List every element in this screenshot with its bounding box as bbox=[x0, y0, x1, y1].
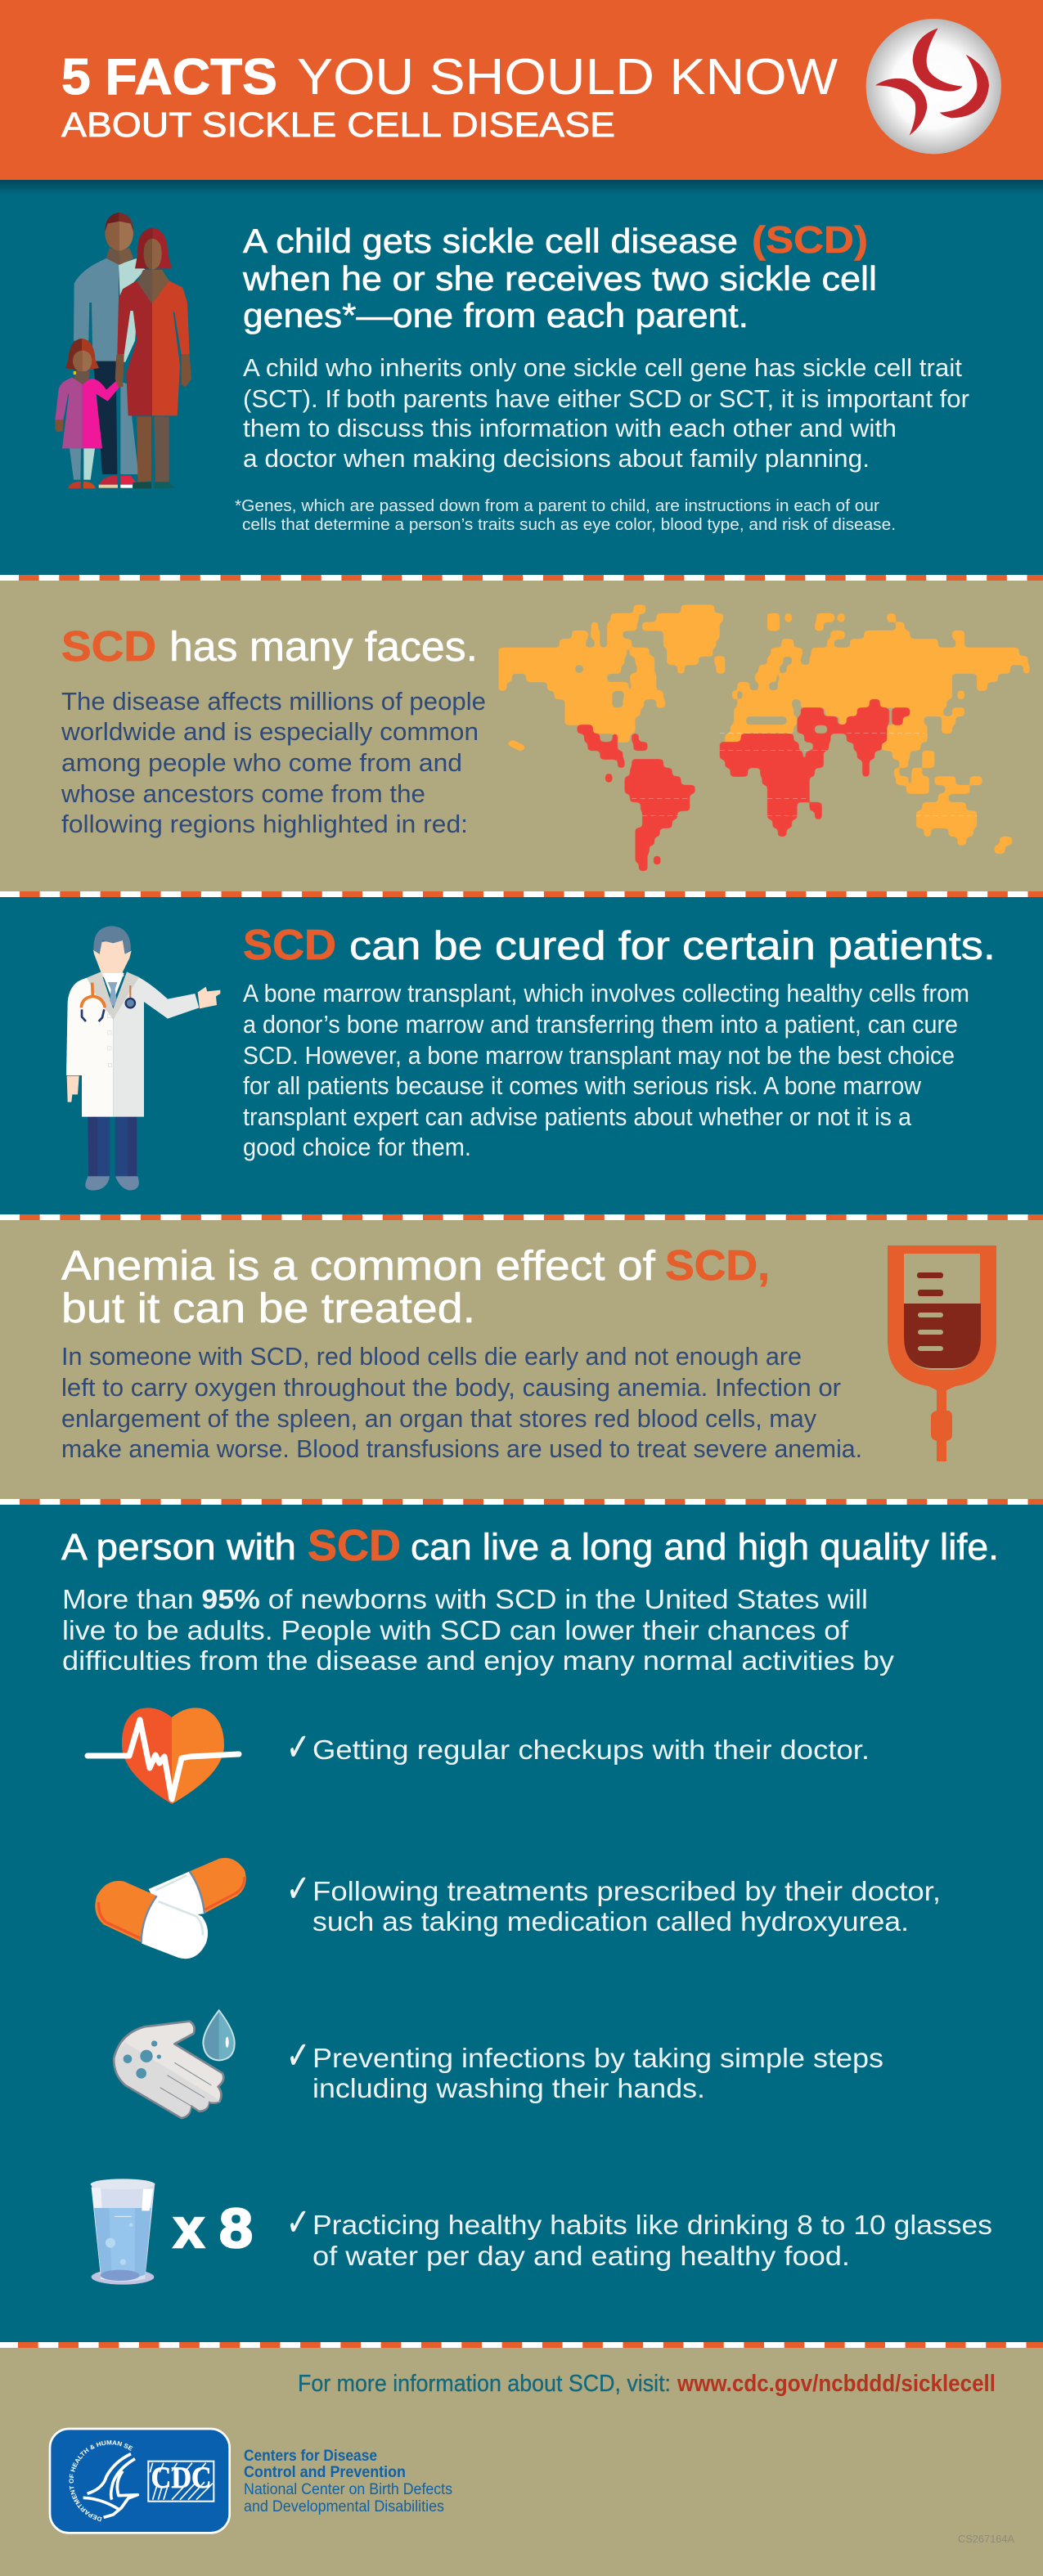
text block: worldwide prevalence: worldwide and is especially common bbox=[61, 717, 479, 746]
heading: anemia: but it can be treated. bbox=[61, 1285, 475, 1331]
panel: footer bbox=[0, 2348, 1043, 2576]
text block: agency names: and Developmental Disabilities bbox=[244, 2498, 444, 2515]
header banner bbox=[0, 0, 1043, 180]
text block: 95 percent of newborns: difficulties from the disease and enjoy many normal activities by bbox=[62, 1645, 895, 1676]
logo: HHS and CDC: CDC bbox=[151, 2462, 212, 2495]
text block: 95 percent of newborns bbox=[62, 1584, 895, 1676]
callout: more information link: For more information about SCD, visit: bbox=[298, 2371, 671, 2397]
checklist item: preventing infections: ✓ bbox=[286, 2033, 310, 2077]
heading: how SCD is inherited: (SCD) bbox=[752, 218, 868, 261]
text block: sickle cell trait bbox=[243, 353, 969, 473]
footnote bbox=[235, 497, 896, 534]
panel: anemia bbox=[0, 1220, 1043, 1499]
icon: capsules bbox=[95, 1858, 246, 1959]
panel: how a child gets SCD bbox=[0, 180, 1043, 575]
checklist item: healthy habits bbox=[286, 2200, 992, 2271]
label: times eight: 8 bbox=[219, 2197, 253, 2260]
checklist item: regular checkups: ✓ bbox=[286, 1725, 310, 1769]
text block: agency names: Control and Prevention bbox=[244, 2464, 406, 2481]
checklist item: treatments: Following treatments prescribed by their doctor, bbox=[312, 1876, 941, 1906]
heading: anemia: SCD, bbox=[665, 1242, 770, 1290]
icon: hand and water drop bbox=[114, 2010, 235, 2118]
checklist item: preventing infections: Preventing infections by taking simple steps bbox=[312, 2043, 883, 2073]
text block: bone marrow transplant: SCD. However, a bone marrow transplant may not be the best choice bbox=[243, 1041, 955, 1070]
heading: many faces: SCD bbox=[61, 623, 156, 671]
text block: bone marrow transplant: transplant expert can advise patients about whether or not it is a bbox=[243, 1102, 912, 1131]
text block: agency names bbox=[244, 2448, 452, 2515]
heading: how SCD is inherited: when he or she receives two sickle cell bbox=[242, 259, 877, 298]
text block: agency names: Centers for Disease bbox=[244, 2448, 377, 2465]
icon: blood bag bbox=[888, 1245, 996, 1461]
label: times eight: x bbox=[173, 2197, 205, 2260]
heading: anemia: Anemia is a common effect of bbox=[61, 1242, 656, 1289]
callout: more information link bbox=[298, 2371, 996, 2397]
panel: long and high quality life bbox=[0, 1505, 1043, 2342]
heading: how SCD is inherited bbox=[242, 218, 877, 334]
callout: more information link: www.cdc.gov/ncbddd/sicklecell bbox=[677, 2371, 996, 2397]
heading: quality of life: A person with bbox=[61, 1526, 296, 1568]
text block: anemia explanation: left to carry oxygen throughout the body, causing anemia. Infection or bbox=[61, 1373, 841, 1402]
text block: sickle cell trait: a doctor when making decisions about family planning. bbox=[243, 444, 870, 473]
title: 5 FACTS bbox=[61, 49, 277, 105]
text block: sickle cell trait: A child who inherits only one sickle cell gene has sickle cell trait bbox=[243, 353, 962, 382]
icon: heart with pulse line bbox=[88, 1708, 239, 1804]
text block: 95 percent of newborns: More than 95% of newborns with SCD in the United States will bbox=[62, 1584, 868, 1614]
text block: anemia explanation bbox=[61, 1342, 862, 1463]
label: times eight bbox=[173, 2197, 253, 2260]
panel: SCD has many faces bbox=[0, 581, 1043, 891]
heading: quality of life: can live a long and high quality life. bbox=[411, 1526, 999, 1568]
text block: worldwide prevalence: The disease affects millions of people bbox=[61, 687, 486, 716]
heading: how SCD is inherited: A child gets sickle cell disease bbox=[243, 222, 738, 260]
text block: bone marrow transplant: good choice for them. bbox=[243, 1133, 471, 1161]
text block: sickle cell trait: them to discuss this information with each other and with bbox=[243, 414, 897, 442]
checklist item: healthy habits: of water per day and eating healthy food. bbox=[312, 2241, 850, 2271]
heading: SCD can be cured: SCD bbox=[243, 922, 336, 969]
checklist item: healthy habits: Practicing healthy habits like drinking 8 to 10 glasses bbox=[312, 2210, 992, 2240]
logo: HHS and CDC: DEPARTMENT OF HEALTH & HUMAN SERVICES · USA bbox=[69, 2440, 133, 2522]
publication code: CS267164A bbox=[958, 2533, 1014, 2545]
checklist item: treatments: ✓ bbox=[286, 1866, 310, 1910]
icon: sickle cells in circle bbox=[866, 19, 1001, 154]
heading: how SCD is inherited: genes*—one from each parent. bbox=[243, 296, 749, 334]
title: ABOUT SICKLE CELL DISEASE bbox=[61, 105, 615, 145]
text block: bone marrow transplant: a donor’s bone marrow and transferring them into a patient, can cure bbox=[243, 1010, 958, 1039]
chart: hexagon world map bbox=[498, 609, 1030, 867]
text block: bone marrow transplant: for all patients because it comes with serious risk. A bone marrow bbox=[243, 1071, 922, 1100]
heading: anemia bbox=[61, 1242, 770, 1331]
checklist item: treatments bbox=[286, 1866, 941, 1936]
footnote: *Genes, which are passed down from a parent to child, are instructions in each of our bbox=[235, 497, 879, 515]
text block: anemia explanation: In someone with SCD, red blood cells die early and not enough are bbox=[61, 1342, 802, 1371]
text block: 95 percent of newborns: live to be adults. People with SCD can lower their chances of bbox=[62, 1615, 849, 1645]
text block: anemia explanation: make anemia worse. Blood transfusions are used to treat severe anemia. bbox=[61, 1434, 862, 1463]
icon: doctor bbox=[66, 926, 220, 1191]
checklist item: preventing infections: including washing their hands. bbox=[312, 2073, 705, 2103]
text block: bone marrow transplant: A bone marrow transplant, which involves collecting healthy cells from bbox=[243, 979, 969, 1008]
heading: quality of life bbox=[61, 1521, 999, 1570]
checklist item: regular checkups: Getting regular checkups with their doctor. bbox=[312, 1735, 870, 1765]
text block: sickle cell trait: (SCT). If both parents have either SCD or SCT, it is important for bbox=[243, 384, 969, 413]
checklist item: treatments: such as taking medication called hydroxyurea. bbox=[312, 1906, 909, 1936]
checklist item: healthy habits: ✓ bbox=[286, 2200, 310, 2244]
text block: worldwide prevalence bbox=[61, 687, 486, 838]
panel: SCD can be cured bbox=[0, 897, 1043, 1214]
title: YOU SHOULD KNOW bbox=[297, 49, 838, 105]
text block: worldwide prevalence: whose ancestors come from the bbox=[61, 779, 425, 808]
footnote: cells that determine a person’s traits such as eye color, blood type, and risk of disease. bbox=[242, 516, 896, 534]
text block: worldwide prevalence: among people who come from and bbox=[61, 748, 462, 777]
checklist item: regular checkups bbox=[286, 1725, 870, 1769]
icon: glass of water bbox=[91, 2179, 155, 2285]
logo: HHS and CDC bbox=[49, 2427, 231, 2534]
title bbox=[61, 49, 838, 145]
heading: many faces: has many faces. bbox=[169, 623, 478, 670]
icon: family bbox=[55, 213, 191, 488]
heading: quality of life: SCD bbox=[308, 1521, 401, 1570]
text block: anemia explanation: enlargement of the spleen, an organ that stores red blood cells, may bbox=[61, 1404, 816, 1433]
text block: agency names: National Center on Birth Defects bbox=[244, 2481, 452, 2498]
heading: SCD can be cured: can be cured for certain patients. bbox=[349, 924, 996, 968]
text block: bone marrow transplant bbox=[243, 979, 969, 1161]
text block: worldwide prevalence: following regions highlighted in red: bbox=[61, 810, 468, 838]
checklist item: preventing infections bbox=[286, 2033, 883, 2103]
